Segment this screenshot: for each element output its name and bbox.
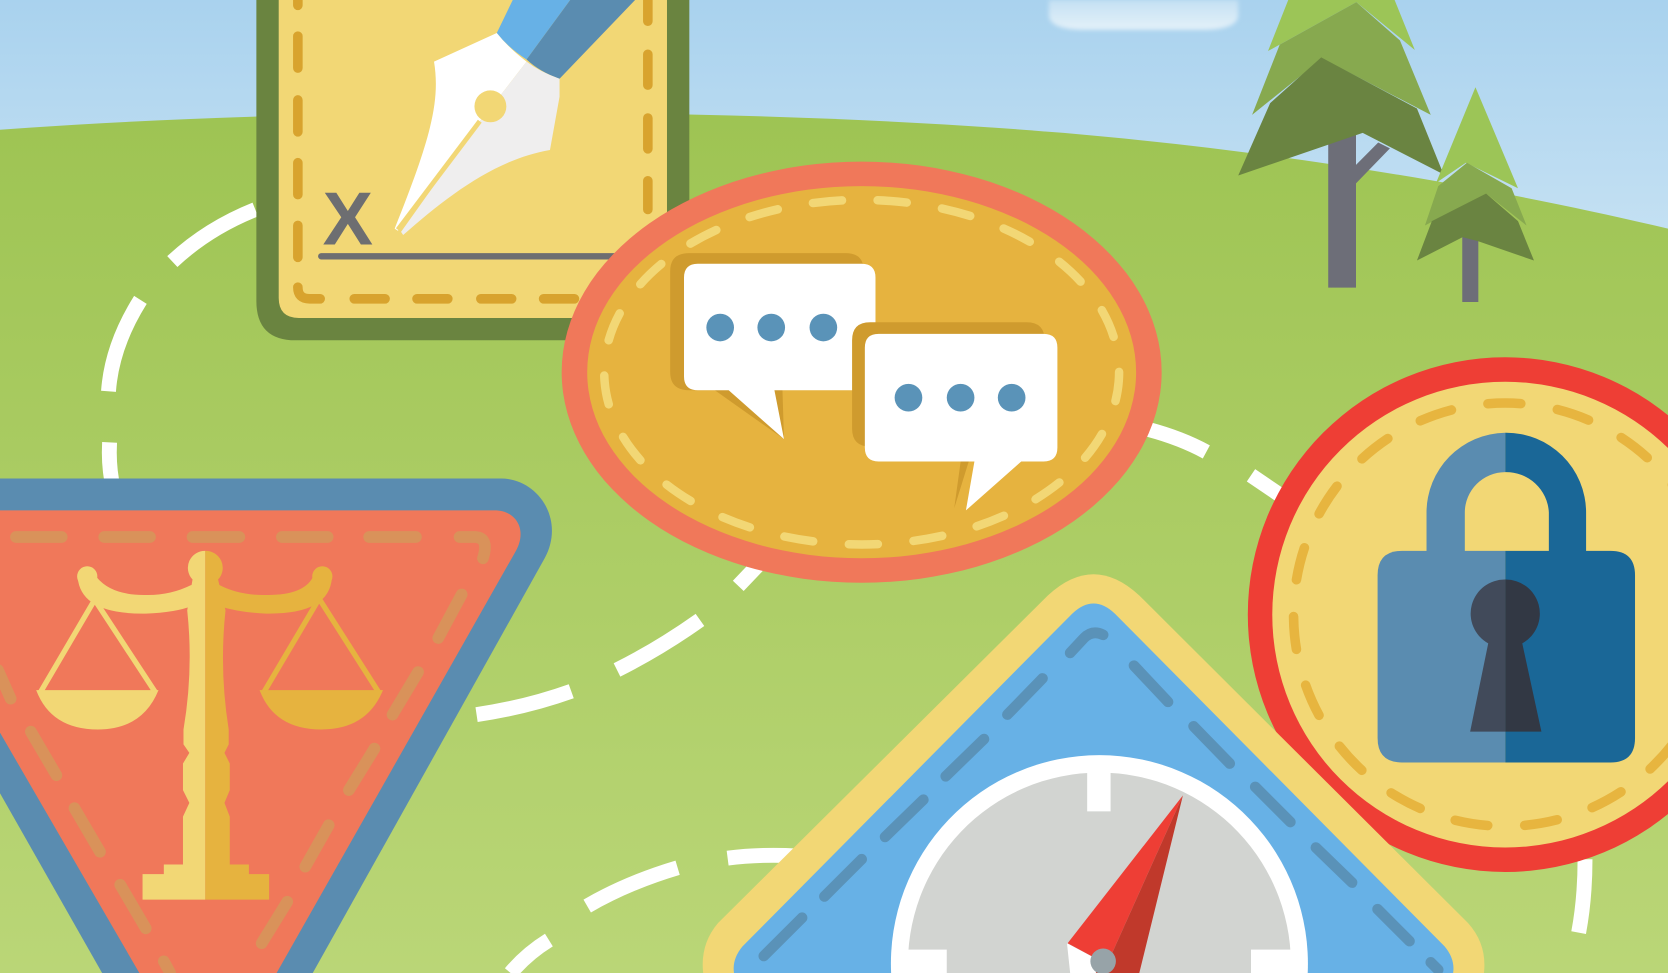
outer triangle — [0, 479, 552, 973]
badge frame — [256, 0, 689, 340]
compass badge — [703, 574, 1484, 973]
signature badge — [256, 0, 689, 340]
stitching — [764, 633, 1438, 970]
beam — [78, 577, 191, 614]
stitching — [604, 200, 1119, 544]
icon: left speech bubble — [670, 253, 875, 439]
outer ellipse — [562, 162, 1162, 583]
left pan — [40, 600, 155, 692]
badge face — [279, 0, 667, 318]
inner ellipse — [587, 186, 1136, 558]
speech badge — [562, 162, 1162, 583]
letter x: X — [323, 178, 373, 262]
right pan — [264, 599, 379, 692]
compass dial — [891, 755, 1308, 973]
signature line — [318, 253, 627, 259]
icon: padlock — [1378, 433, 1635, 762]
small tree — [1417, 87, 1534, 302]
icon: scales of justice — [36, 551, 383, 900]
lock badge red ring — [1248, 357, 1668, 872]
inner circle — [1272, 382, 1668, 848]
column — [143, 551, 205, 900]
stitching — [298, 0, 648, 299]
inner diamond — [734, 603, 1453, 973]
justice badge — [0, 479, 552, 973]
large tree — [1238, 0, 1444, 288]
compass needle — [1067, 795, 1183, 973]
inner triangle — [0, 510, 521, 973]
lock badge — [1272, 382, 1668, 848]
icon: fountain pen — [395, 0, 635, 235]
outer diamond — [703, 574, 1484, 973]
cloud — [1049, 0, 1238, 30]
stitching — [0, 537, 485, 973]
icon: right speech bubble — [852, 322, 1057, 510]
stitching — [1294, 403, 1668, 826]
dashed white trail — [109, 209, 1585, 973]
sky background — [0, 0, 1668, 276]
